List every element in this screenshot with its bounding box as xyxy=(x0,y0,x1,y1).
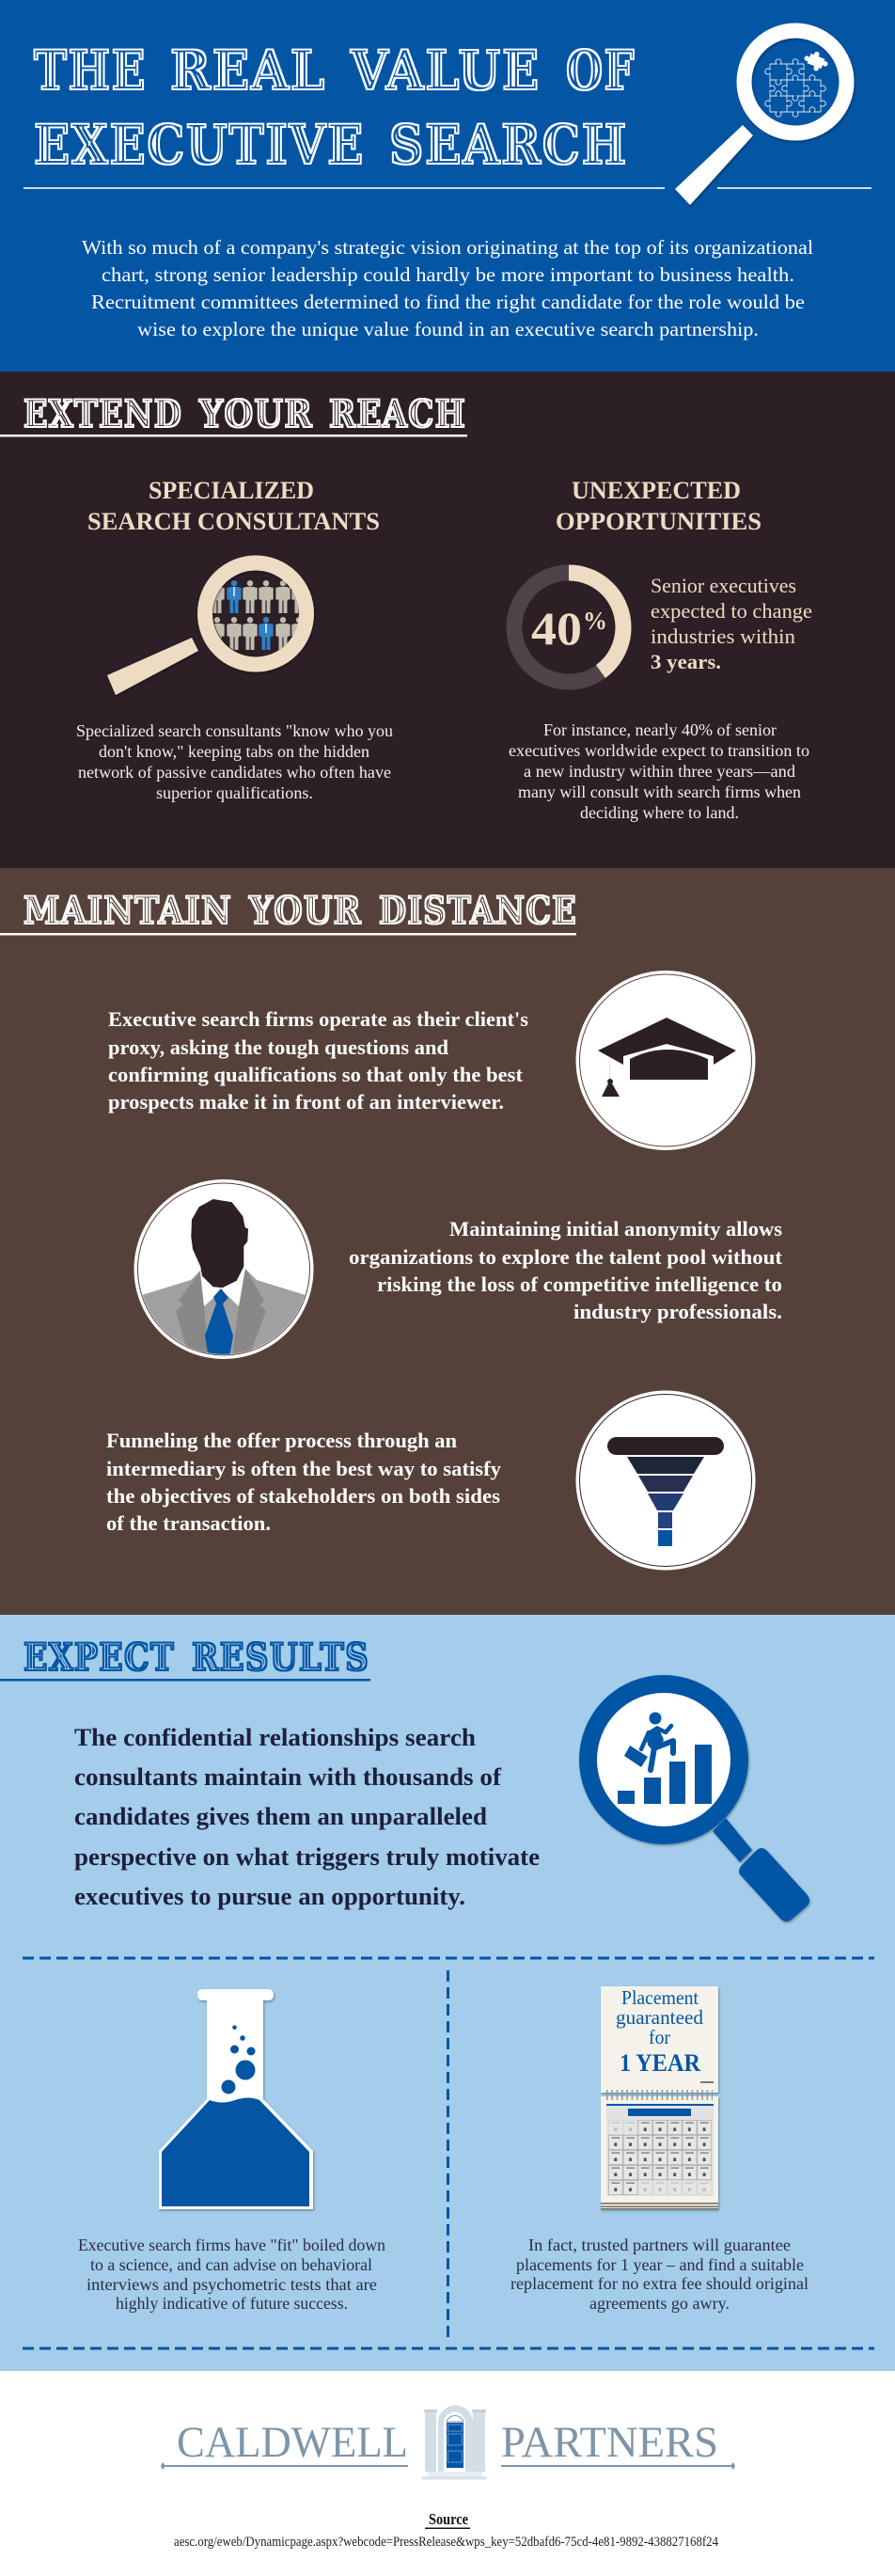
text: guarantee: placements for 1 year – and find a suitable xyxy=(516,2255,804,2274)
text: anonymity: industry professionals. xyxy=(573,1300,782,1323)
text: placement guaranteed: 1 YEAR xyxy=(620,2049,700,2077)
subheading: unexpected opportunities xyxy=(556,477,762,535)
icon: door xyxy=(422,2406,487,2479)
subheading: specialized search consultants: SEARCH CONSULTANTS xyxy=(87,508,380,535)
text: anonymity xyxy=(349,1217,783,1323)
text: senior executives stat: industries within xyxy=(651,624,795,648)
text: senior executives stat: Senior executives xyxy=(651,574,796,597)
icon: magnifying glass with puzzle xyxy=(675,30,846,205)
heading: maintain your distance: YOUR xyxy=(248,889,362,933)
icon: magnifying glass over people xyxy=(107,562,306,695)
title: EXECUTIVE xyxy=(34,113,365,177)
text: senior executives stat xyxy=(651,574,812,673)
intro paragraph: Recruitment committees determined to find the right candidate for the role would be xyxy=(91,291,805,313)
text: confidential relationships: executives to pursue an opportunity. xyxy=(74,1883,465,1910)
title xyxy=(34,39,636,177)
subheading: unexpected opportunities: UNEXPECTED xyxy=(572,477,741,504)
text: confidential relationships: The confidential relationships search xyxy=(74,1724,477,1751)
text: specialized consultants: Specialized search consultants "know who you xyxy=(76,721,393,740)
text: funneling xyxy=(106,1429,502,1535)
divider: dashed vertical xyxy=(447,1970,449,2337)
text: fit science: Executive search firms have "fit" boiled down xyxy=(78,2236,385,2254)
icon: climbing figure xyxy=(624,1712,673,1770)
title: THE xyxy=(34,39,147,103)
donut chart: 40%: 40 xyxy=(531,602,582,655)
text: guarantee xyxy=(510,2236,809,2313)
text: fit science: interviews and psychometric tests that are xyxy=(86,2275,377,2294)
text: nearly 40 percent: a new industry within three years—and xyxy=(524,762,795,781)
text: proxy: confirming qualifications so that only the best xyxy=(108,1063,524,1086)
icon: loose puzzle piece xyxy=(801,48,831,74)
text: confidential relationships: candidates gives them an unparalleled xyxy=(74,1803,488,1830)
title: SEARCH xyxy=(389,113,628,177)
text: anonymity: risking the loss of competitive intelligence to xyxy=(377,1272,782,1296)
subheading: unexpected opportunities: OPPORTUNITIES xyxy=(556,508,762,535)
text: fit science xyxy=(78,2236,385,2313)
text: nearly 40 percent: many will consult with search firms when xyxy=(518,782,801,801)
text: specialized consultants: superior qualifications. xyxy=(156,783,313,802)
icon: puzzle pieces xyxy=(765,59,825,117)
text: specialized consultants: network of passive candidates who often have xyxy=(78,763,391,782)
text: senior executives stat: 3 years. xyxy=(651,650,721,673)
text: nearly 40 percent: executives worldwide expect to transition to xyxy=(509,741,809,760)
icon: flask xyxy=(159,1989,313,2209)
icon: people in lens xyxy=(212,580,299,650)
icon: funnel xyxy=(575,1390,756,1571)
text: funneling: intermediary is often the best way to satisfy xyxy=(106,1457,502,1480)
icon: anonymous executive xyxy=(132,1179,320,1364)
text: placement guaranteed: guaranteed xyxy=(616,2006,703,2029)
text: confidential relationships: perspective on what triggers truly motivate xyxy=(74,1843,540,1871)
panel: extend your reach xyxy=(0,371,895,868)
title: REAL xyxy=(170,39,326,103)
subheading: specialized search consultants: SPECIALIZED xyxy=(149,477,314,504)
divider: dashed horizontal top xyxy=(23,1956,874,1960)
heading: maintain your distance xyxy=(24,889,577,933)
title: OF xyxy=(566,39,636,103)
text: funneling: Funneling the offer process through an xyxy=(106,1429,457,1452)
text: funneling: the objectives of stakeholders on both sides xyxy=(106,1484,500,1508)
text: proxy: proxy, asking the tough questions and xyxy=(108,1035,448,1059)
text: confidential relationships xyxy=(74,1724,540,1910)
heading: expect results xyxy=(24,1636,369,1680)
text: funneling: of the transaction. xyxy=(106,1511,271,1535)
intro paragraph: wise to explore the unique value found in an executive search partnership. xyxy=(137,318,759,340)
donut chart: 40%: % xyxy=(583,607,607,635)
text: specialized consultants xyxy=(76,721,393,802)
text: nearly 40 percent: For instance, nearly 40% of senior xyxy=(543,720,777,739)
intro paragraph: With so much of a company's strategic vision originating at the top of its organizational xyxy=(82,236,813,259)
logo: caldwell partners: CALDWELL xyxy=(177,2418,408,2467)
text: proxy xyxy=(108,1007,528,1114)
heading: extend your reach xyxy=(24,392,466,436)
source url: aesc.org/eweb/Dynamicpage.aspx?webcode=PressRelease&wps_key=52dbafd6-75cd-4e81-9892-438827168f24 xyxy=(174,2535,719,2550)
text: guarantee: replacement for no extra fee should original xyxy=(510,2274,809,2293)
panel: maintain your distance xyxy=(0,868,895,1615)
panel: expect results xyxy=(0,1615,895,2371)
icon: calendar xyxy=(601,1986,718,2209)
text: confidential relationships: consultants maintain with thousands of xyxy=(74,1763,501,1791)
text: placement guaranteed: Placement xyxy=(621,1986,699,2009)
text: fit science: to a science, and can advise on behavioral xyxy=(90,2255,372,2274)
text: specialized consultants: don't know," keeping tabs on the hidden xyxy=(99,742,369,761)
icon: graduation cap xyxy=(575,971,756,1150)
intro paragraph: chart, strong senior leadership could hardly be more important to business health. xyxy=(102,263,794,286)
panel: header xyxy=(0,0,895,371)
text: nearly 40 percent xyxy=(509,720,809,822)
logo: caldwell partners xyxy=(161,2406,735,2479)
donut chart: 40% xyxy=(514,573,623,682)
icon: rising bars xyxy=(618,1745,712,1804)
heading: extend your reach: YOUR xyxy=(198,392,313,436)
heading: maintain your distance: MAINTAIN xyxy=(24,889,232,933)
intro paragraph xyxy=(82,236,813,340)
logo: caldwell partners: PARTNERS xyxy=(501,2418,718,2467)
text: senior executives stat: expected to change xyxy=(651,599,812,623)
text: guarantee: agreements go awry. xyxy=(589,2294,730,2313)
text: placement guaranteed xyxy=(616,1986,703,2077)
subheading: specialized search consultants xyxy=(87,477,380,535)
heading: extend your reach: REACH xyxy=(329,392,466,436)
divider: dashed horizontal bottom xyxy=(23,2347,874,2349)
text: proxy: prospects make it in front of an interviewer. xyxy=(108,1090,504,1114)
heading: maintain your distance: DISTANCE xyxy=(379,889,577,933)
panel: footer xyxy=(0,2371,895,2576)
heading: expect results: RESULTS xyxy=(192,1636,369,1680)
icon: magnifying glass with climbing executive xyxy=(589,1683,809,1921)
title: VALUE xyxy=(350,39,541,103)
text: anonymity: Maintaining initial anonymity allows xyxy=(449,1217,782,1241)
heading: expect results: EXPECT xyxy=(24,1636,175,1680)
text: nearly 40 percent: deciding where to land. xyxy=(580,803,739,822)
heading: extend your reach: EXTEND xyxy=(24,392,182,436)
source heading: Source xyxy=(429,2510,468,2528)
text: guarantee: In fact, trusted partners will guarantee xyxy=(528,2236,791,2254)
text: placement guaranteed: for xyxy=(649,2026,670,2048)
text: fit science: highly indicative of future success. xyxy=(116,2294,348,2313)
text: proxy: Executive search firms operate as their client's xyxy=(108,1007,528,1031)
text: anonymity: organizations to explore the talent pool without xyxy=(349,1245,783,1269)
